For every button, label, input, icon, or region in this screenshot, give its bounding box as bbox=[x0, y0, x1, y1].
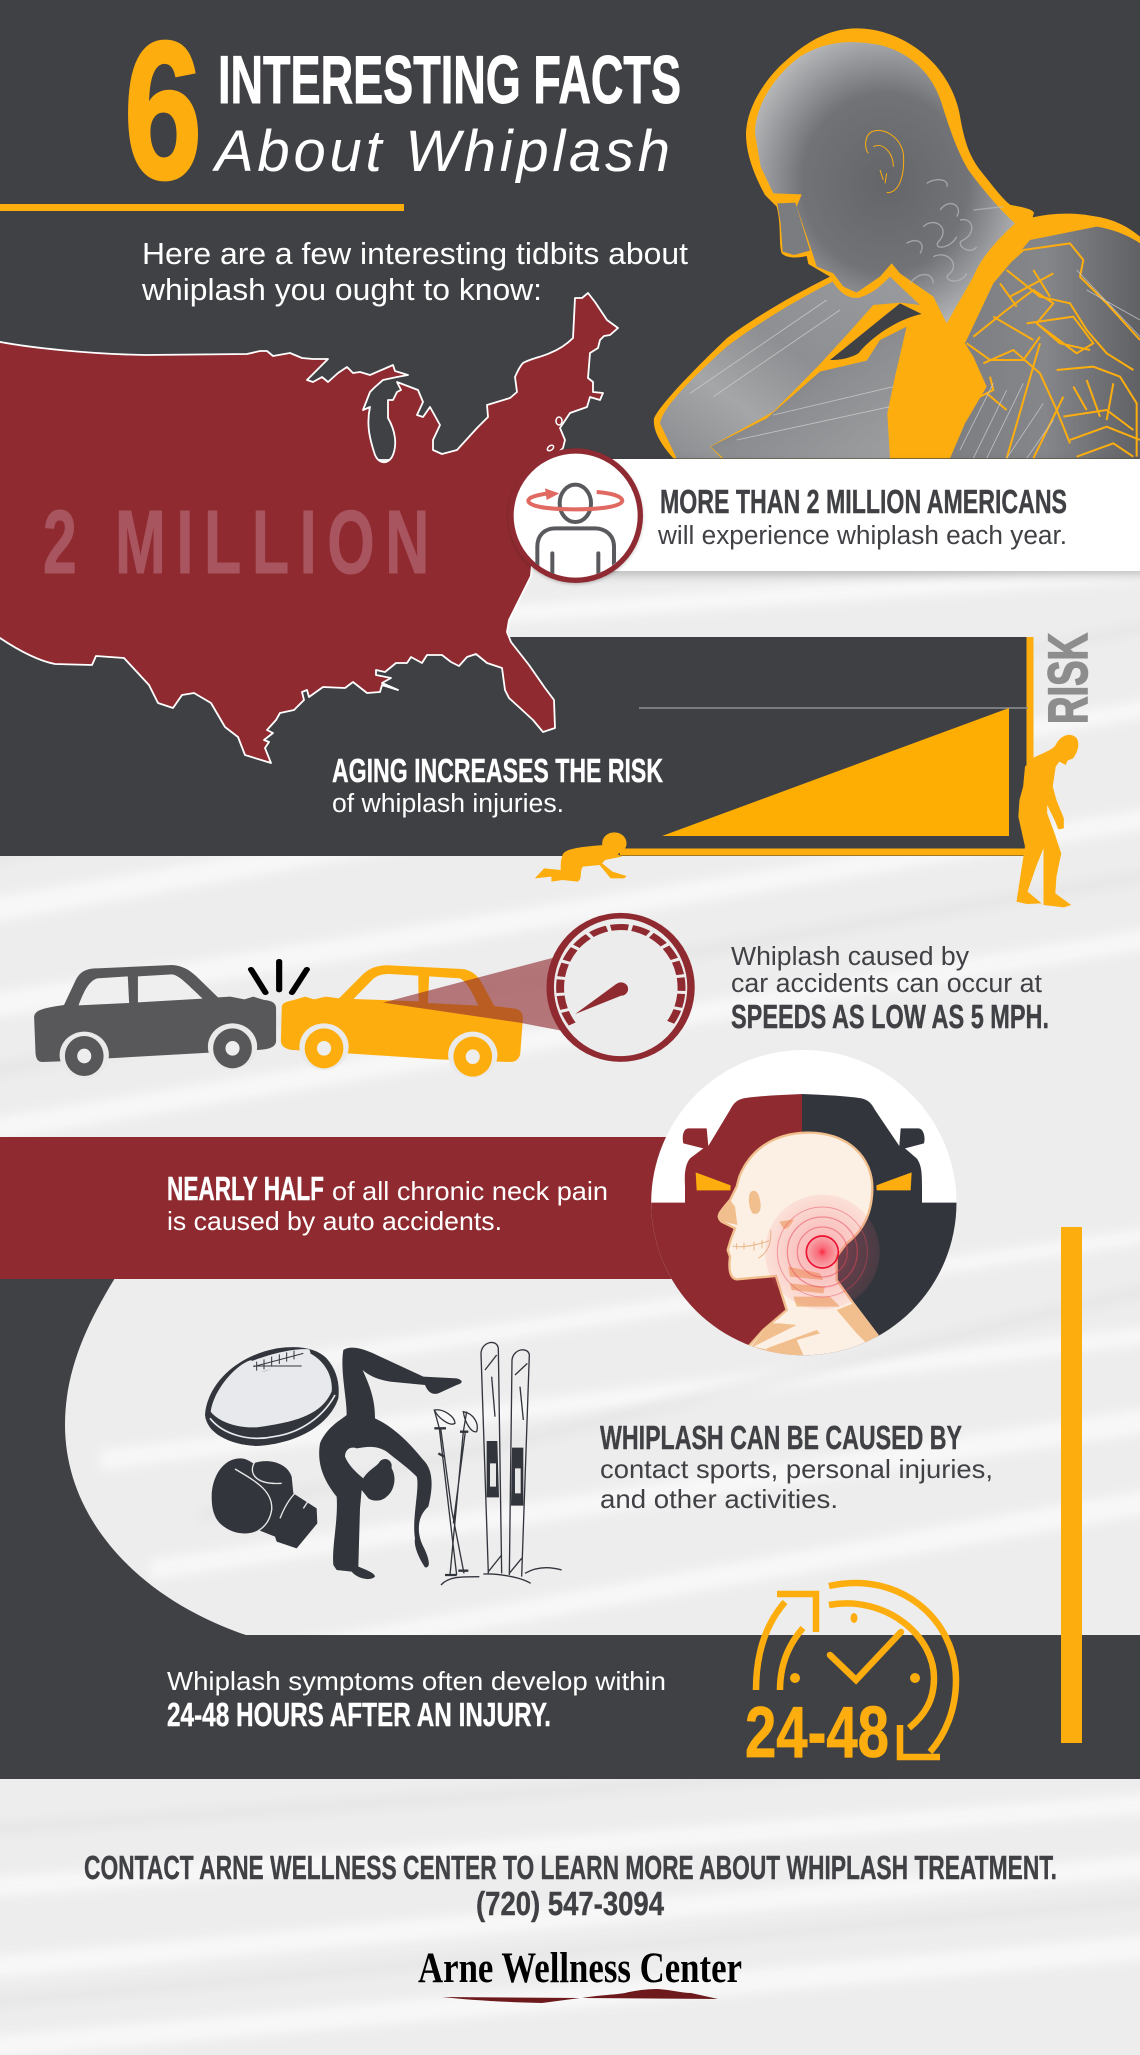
pain rings bbox=[765, 1195, 880, 1309]
intro text bbox=[141, 237, 689, 307]
car left half bbox=[683, 1094, 802, 1203]
text: nearly half: is caused by auto accidents. bbox=[167, 1206, 502, 1236]
title line two: About Whiplash bbox=[212, 119, 670, 184]
map islands bbox=[546, 417, 562, 452]
yellow car bbox=[281, 965, 523, 1078]
intro text: Here are a few interesting tidbits about bbox=[142, 237, 689, 271]
call to action: (720) 547-3094 bbox=[476, 1885, 665, 1922]
icon: person turning head bbox=[511, 451, 640, 583]
yellow vertical accent bar bbox=[1061, 1227, 1082, 1743]
muscle fibres bbox=[690, 270, 1140, 458]
call to action bbox=[84, 1849, 1057, 1922]
clock ticks bbox=[790, 1613, 920, 1683]
clock check mark bbox=[830, 1632, 901, 1680]
panel: two million americans banner bbox=[560, 459, 1140, 571]
panel: aging dark band bbox=[0, 637, 1027, 856]
grey car bbox=[34, 965, 276, 1078]
text: symptoms: Whiplash symptoms often develop within bbox=[167, 1666, 666, 1696]
gap between arm and chest bbox=[830, 303, 922, 360]
risk axis bbox=[620, 637, 1030, 852]
crash marks bbox=[251, 961, 307, 993]
neck tissue bbox=[907, 180, 1003, 283]
torso bbox=[711, 327, 907, 458]
ear bbox=[866, 130, 904, 193]
text: causes bbox=[600, 1419, 993, 1514]
title bbox=[124, 1, 681, 220]
title line one: INTERESTING FACTS bbox=[218, 42, 681, 118]
illustration: x-ray figure with hand on neck bbox=[654, 28, 1140, 458]
text: causes: and other activities. bbox=[600, 1484, 838, 1514]
aging text: of whiplash injuries. bbox=[332, 790, 564, 818]
panel: nearly half banner bbox=[0, 1137, 680, 1279]
icon: crawling baby bbox=[535, 832, 627, 882]
figure silhouette outline bbox=[654, 28, 1140, 458]
speed text: Whiplash caused by bbox=[731, 943, 969, 971]
banner text: will experience whiplash each year. bbox=[657, 522, 1067, 550]
logo swoosh bbox=[442, 1989, 718, 2003]
facial features and cervical bones bbox=[717, 1191, 877, 1355]
text: causes: WHIPLASH CAN BE CAUSED BY bbox=[600, 1419, 962, 1456]
icon: skis bbox=[481, 1342, 562, 1583]
icon: stooped elder bbox=[1016, 735, 1078, 907]
icon: clock with arrows bbox=[745, 1583, 956, 1773]
illustration: sports equipment bbox=[205, 1342, 562, 1585]
icon: football bbox=[205, 1347, 339, 1446]
speedometer bbox=[550, 916, 691, 1059]
panel: symptoms dark band bbox=[0, 1635, 1140, 1779]
text: causes: contact sports, personal injuries, bbox=[600, 1454, 993, 1484]
icon: ski poles bbox=[434, 1410, 479, 1585]
icon: gymnast bbox=[319, 1348, 462, 1579]
logo: Arne Wellness Center bbox=[418, 1945, 742, 2003]
skull bbox=[719, 1133, 877, 1358]
text: symptoms: 24-48 HOURS AFTER AN INJURY. bbox=[167, 1696, 551, 1733]
text: nearly half: NEARLY HALF bbox=[167, 1170, 324, 1207]
chart: risk rising with age bbox=[535, 633, 1099, 907]
intro text: whiplash you ought to know: bbox=[141, 273, 542, 307]
magnifying beam bbox=[383, 957, 561, 1031]
illustration: car crash and speedometer bbox=[34, 916, 691, 1078]
car right half bbox=[802, 1094, 925, 1203]
risk triangle bbox=[662, 708, 1009, 836]
clock label: 24-48 bbox=[745, 1693, 889, 1773]
logo: Arne Wellness Center: Arne Wellness Center bbox=[418, 1945, 742, 1992]
map: eastern United States bbox=[0, 293, 618, 763]
head and neck bbox=[755, 42, 1015, 323]
aging text: AGING INCREASES THE RISK bbox=[332, 752, 663, 789]
text: nearly half: of all chronic neck pain bbox=[332, 1176, 608, 1206]
clock arcs bbox=[829, 1583, 956, 1752]
aging text bbox=[332, 752, 663, 818]
title underline bbox=[0, 204, 404, 211]
text: nearly half bbox=[167, 1170, 608, 1236]
nerve network bbox=[967, 243, 1140, 458]
title numeral 6: 6 bbox=[124, 1, 202, 220]
speed text bbox=[731, 943, 1049, 1035]
shoulder and ribs bbox=[950, 227, 1140, 458]
panel: sports curved cutout bbox=[0, 1278, 249, 1636]
icon: boxing glove bbox=[212, 1458, 317, 1548]
illustration: skull and neck pain with car bbox=[651, 1050, 958, 1360]
risk label: RISK bbox=[1036, 633, 1099, 724]
forearm bbox=[660, 277, 920, 458]
text: symptoms bbox=[167, 1666, 666, 1733]
arrow heads bbox=[777, 1594, 816, 1632]
top dark panel bbox=[0, 0, 1140, 459]
car headlights bbox=[696, 1172, 731, 1190]
speed text: car accidents can occur at bbox=[731, 970, 1042, 998]
map value: 2 MILLION bbox=[43, 493, 440, 593]
risk guide line bbox=[639, 707, 1028, 709]
